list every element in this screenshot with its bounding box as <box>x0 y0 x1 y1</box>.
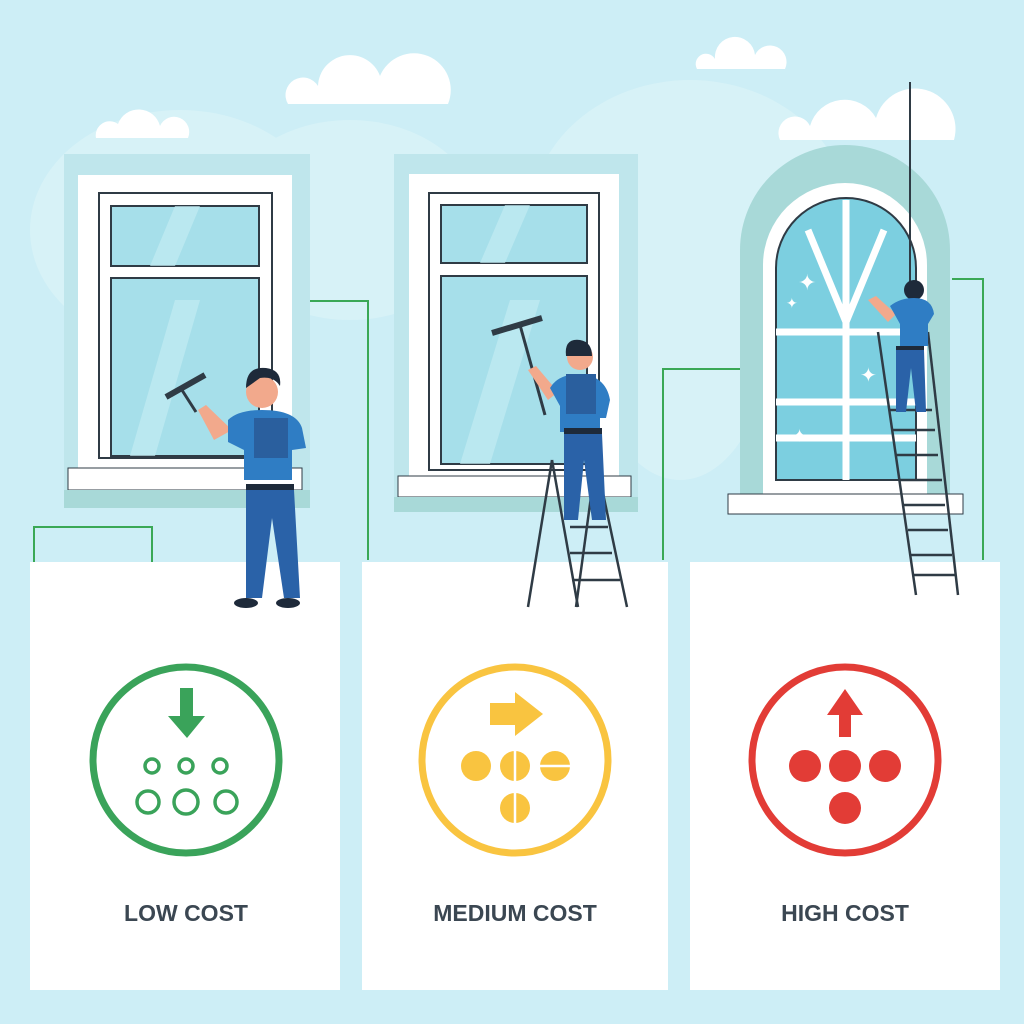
icon: low cost <box>93 667 279 853</box>
panels <box>30 562 1000 990</box>
label: high cost: HIGH COST <box>781 900 909 926</box>
icon: medium cost <box>422 667 608 853</box>
label: medium cost: MEDIUM COST <box>433 900 597 926</box>
window 1 <box>64 154 310 508</box>
window 3 arched: ✦ <box>792 426 807 446</box>
icon: high cost <box>752 667 938 853</box>
window 3 arched: ✦ <box>798 270 816 295</box>
window 3 arched: ✦ <box>786 295 798 311</box>
clouds <box>96 37 956 140</box>
window 3 arched: ✦ <box>860 365 877 387</box>
window 2 <box>394 154 638 512</box>
green outline buildings <box>34 279 983 565</box>
worker 3 with ladder <box>868 280 958 595</box>
background hills <box>30 80 850 480</box>
worker 2 with ladder <box>492 318 627 607</box>
window 3 arched <box>728 82 963 514</box>
worker 1 <box>166 368 306 608</box>
label: low cost: LOW COST <box>124 900 248 926</box>
